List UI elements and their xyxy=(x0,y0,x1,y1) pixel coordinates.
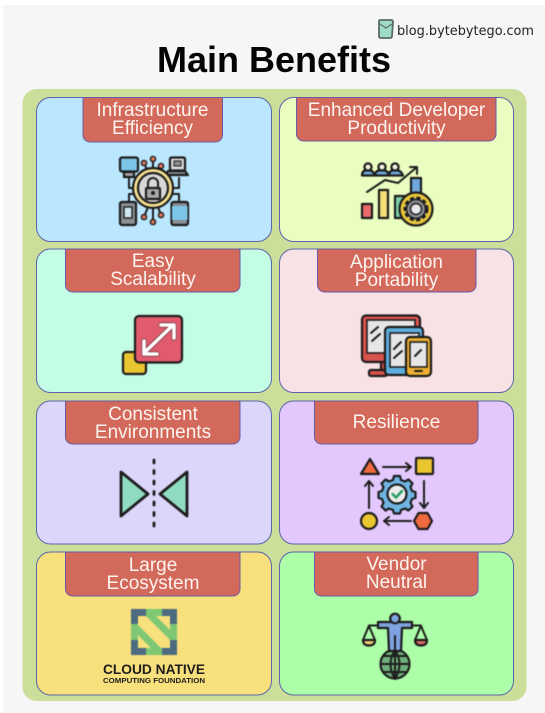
logo: cloud native computing foundation xyxy=(103,609,205,685)
panel: resilience xyxy=(280,401,514,544)
label: vendor neutral: Vendor xyxy=(366,554,427,575)
icon: resize arrows xyxy=(123,316,182,374)
label: enhanced developer productivity: Productivity xyxy=(347,118,446,139)
panel: consistent environments xyxy=(36,401,272,544)
logo: cloud native computing foundation: CLOUD NATIVE xyxy=(103,662,205,677)
label: application portability xyxy=(318,249,476,292)
label: application portability: Application xyxy=(350,252,443,273)
label: enhanced developer productivity: Enhanced Developer xyxy=(308,100,486,121)
label: easy scalability: Easy xyxy=(132,251,175,272)
label: consistent environments: Environments xyxy=(95,422,211,443)
icon: balanced scales on globe xyxy=(363,614,427,679)
icon: multiple devices xyxy=(362,316,431,376)
label: large ecosystem xyxy=(66,552,240,596)
label: easy scalability xyxy=(66,249,240,292)
label: easy scalability: Scalability xyxy=(110,269,196,290)
label: resilience xyxy=(314,401,478,444)
label: consistent environments: Consistent xyxy=(108,404,199,425)
icon: mirrored triangles xyxy=(121,460,187,528)
icon: productivity chart xyxy=(362,163,432,226)
label: consistent environments xyxy=(66,401,240,444)
panel: vendor neutral xyxy=(280,552,514,695)
icon: secured network xyxy=(120,156,188,225)
icon: resilience cycle xyxy=(361,458,433,529)
panel: large ecosystem xyxy=(36,552,272,695)
title: Main Benefits xyxy=(157,39,391,80)
label: application portability: Portability xyxy=(355,270,439,291)
logo: blog.bytebytego.com: blog.bytebytego.com xyxy=(397,23,534,39)
label: vendor neutral: Neutral xyxy=(366,572,427,593)
label: large ecosystem: Ecosystem xyxy=(107,573,199,594)
panel: benefits background xyxy=(22,89,526,701)
panel: easy scalability xyxy=(36,249,272,392)
panel: application portability xyxy=(280,249,514,392)
label: infrastructure efficiency: Efficiency xyxy=(112,118,193,139)
label: resilience: Resilience xyxy=(353,412,440,433)
panel: enhanced developer productivity xyxy=(280,98,514,242)
label: vendor neutral xyxy=(314,552,478,596)
panel: infrastructure efficiency xyxy=(36,98,272,242)
label: large ecosystem: Large xyxy=(129,555,177,576)
label: infrastructure efficiency xyxy=(83,98,222,142)
logo: cloud native computing foundation: COMPUTING FOUNDATION xyxy=(103,676,205,685)
label: infrastructure efficiency: Infrastructure xyxy=(97,100,208,121)
label: enhanced developer productivity xyxy=(296,98,496,141)
